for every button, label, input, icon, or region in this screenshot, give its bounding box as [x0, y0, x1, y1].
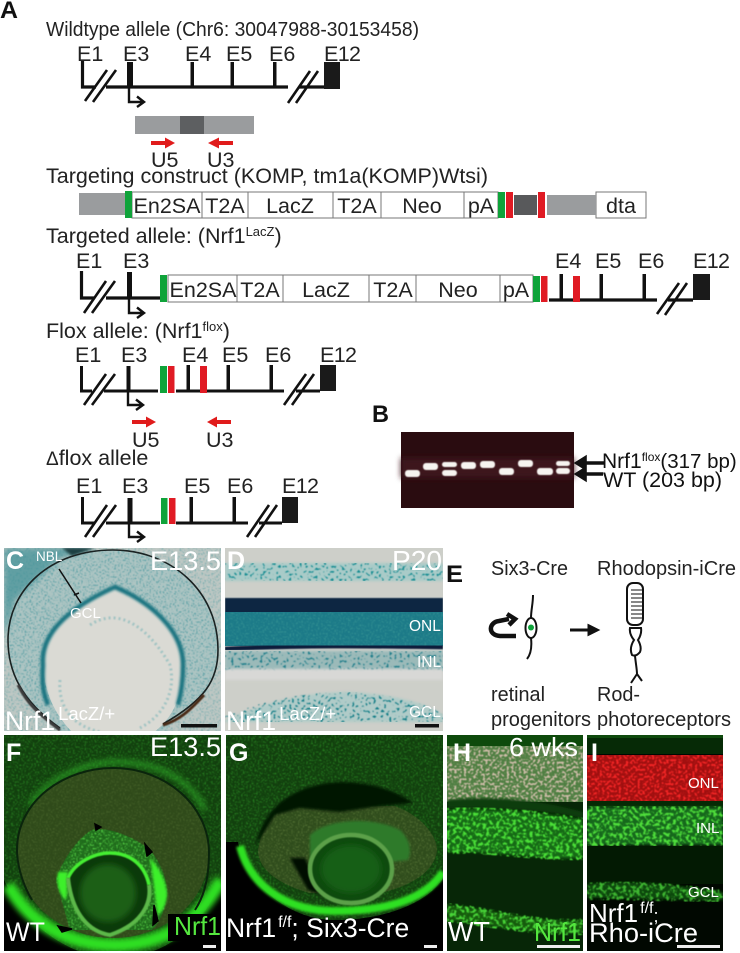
layer labels ONL INL GCL: GCL [409, 704, 441, 721]
gel band labels: WT (203 bp) [603, 469, 722, 492]
flox allele map [75, 343, 357, 410]
arrow to rod [570, 626, 597, 634]
genotype label: Nrf1 [5, 706, 55, 736]
delta flox allele map: E6 [227, 474, 253, 498]
stain label Nrf1: Nrf1 [174, 911, 221, 941]
flox primer arrows U5 and U3: U3 [206, 428, 234, 452]
panel D retina layers image [225, 548, 443, 731]
scale bar [203, 945, 216, 948]
targeting construct bar: pA [468, 194, 495, 218]
gel band labels: flox [642, 450, 660, 464]
layer labels ONL INL GCL: ONL [409, 618, 441, 635]
genotype label: Nrf1 [589, 898, 638, 928]
wildtype allele gene map: E12 [324, 42, 361, 66]
delta flox allele map: E5 [184, 474, 210, 498]
panel C: embryonic LacZ stain [4, 546, 221, 736]
genotype label: ; Six3-Cre [291, 913, 409, 943]
targeting construct bar: T2A [337, 194, 377, 218]
targeted allele heading: LacZ [246, 224, 275, 239]
panel letter F: F [6, 739, 21, 767]
targeting construct bar: Neo [402, 194, 442, 218]
targeted allele heading: Targeted allele: (Nrf1 [46, 224, 246, 248]
flox allele map: E5 [222, 343, 248, 367]
age label 6 wks: 6 wks [509, 732, 578, 762]
delta flox allele map: E12 [282, 474, 319, 498]
panel F: WT immunostain E13.5 [4, 732, 221, 953]
genotype label [589, 898, 698, 948]
flox primer arrows U5 and U3: U5 [132, 428, 160, 452]
panel letter G: G [229, 739, 248, 767]
layer labels ONL INL GCL: ONL [688, 775, 719, 792]
photoreceptor caption: photoreceptors [597, 709, 731, 731]
photoreceptor caption [597, 684, 731, 731]
targeted allele map: pA [503, 278, 530, 302]
stage label P20: P20 [392, 545, 442, 576]
Six3-Cre label: Six3-Cre [491, 558, 568, 580]
targeted allele map: T2A [240, 278, 280, 302]
pointer line NBL to GCL [59, 569, 81, 603]
panel H: WT retina 6 weeks [447, 732, 583, 951]
targeting construct bar: T2A [205, 194, 245, 218]
panel D: P20 LacZ stain [225, 545, 443, 736]
delta flox allele map: E3 [122, 474, 148, 498]
flox allele map: E12 [320, 343, 357, 367]
progenitor caption [491, 684, 591, 731]
genotype label: Nrf1 [226, 706, 276, 736]
homology region bar [135, 116, 254, 134]
wildtype allele gene map: E5 [226, 42, 252, 66]
targeted allele map: T2A [373, 278, 413, 302]
panel letter E: E [446, 561, 463, 588]
panel B: PCR gel [372, 401, 737, 508]
stain label Nrf1: Nrf1 [534, 917, 581, 947]
wildtype allele gene map: E6 [269, 42, 295, 66]
layer labels ONL INL GCL [688, 775, 719, 901]
gel band labels: Nrf1 [602, 450, 642, 473]
genotype label: f/f [640, 900, 654, 917]
targeted allele map: Neo [438, 278, 478, 302]
targeting construct bar [79, 191, 646, 218]
gel band labels: (317 bp) [660, 450, 737, 473]
panel E: cell schematic [446, 558, 736, 731]
panel H retina layers image [447, 735, 583, 951]
targeted allele map: E5 [595, 249, 621, 273]
gel image [401, 432, 574, 508]
flox allele map: E1 [75, 343, 101, 367]
stage label E13.5: E13.5 [150, 732, 221, 762]
targeting construct bar: dta [606, 194, 636, 218]
targeted allele map [76, 249, 730, 318]
targeted allele map: En2SA [170, 278, 237, 302]
panel G: mutant immunostain [226, 735, 443, 951]
panel letter I: I [591, 739, 598, 767]
wildtype allele heading: Wildtype allele (Chr6: 30047988-30153458) [46, 18, 419, 41]
delta flox allele map: E1 [76, 474, 102, 498]
icon: retinal progenitor cell [526, 595, 536, 659]
panel G eye image [226, 735, 443, 951]
progenitor caption: retinal [491, 684, 545, 706]
scale bar [537, 945, 580, 948]
flox primer arrows U5 and U3 [132, 416, 234, 452]
wildtype allele gene map: E4 [185, 42, 211, 66]
gel band labels [602, 450, 737, 492]
targeting construct heading: Targeting construct (KOMP, tm1a(KOMP)Wtsi) [46, 164, 488, 188]
flox allele heading: ) [223, 319, 230, 343]
gel band arrows [577, 458, 604, 479]
primer arrows U5 and U3: U5 [151, 148, 179, 172]
genotype label: f/f [278, 914, 292, 931]
flox allele map: E3 [121, 343, 147, 367]
panel letter H: H [453, 739, 471, 767]
Rhodopsin-iCre label: Rhodopsin-iCre [597, 558, 736, 580]
panel A: allele diagrams [0, 0, 730, 542]
panel I retina layers image [587, 735, 723, 951]
panel letter C: C [6, 547, 24, 575]
panel letter B: B [372, 401, 389, 428]
panel C tissue image [4, 548, 221, 735]
layer label NBL: NBL [36, 549, 63, 564]
layer labels ONL INL GCL [409, 618, 442, 721]
genotype label WT: WT [6, 917, 45, 947]
genotype label: ; [653, 906, 658, 926]
wildtype allele gene map: E3 [123, 42, 149, 66]
layer labels ONL INL GCL: INL [696, 820, 719, 837]
panel F eye image [4, 735, 221, 953]
icon: rod photoreceptor [627, 583, 643, 683]
targeting construct bar: LacZ [266, 194, 314, 218]
wildtype allele gene map [77, 42, 361, 107]
targeted allele map: LacZ [302, 278, 350, 302]
targeted allele map: E1 [76, 249, 102, 273]
genotype label WT: WT [448, 916, 490, 947]
genotype label: Rho-iCre [589, 918, 698, 948]
scale bar [677, 945, 720, 948]
primer arrows U5 and U3: U3 [207, 148, 235, 172]
targeted allele map: E6 [638, 249, 664, 273]
targeting construct bar: En2SA [134, 194, 201, 218]
panel letter D: D [227, 547, 245, 575]
targeted allele map: E3 [123, 249, 149, 273]
icon: self-renewal curved arrow [491, 614, 516, 636]
photoreceptor caption: Rod- [597, 684, 640, 706]
targeted allele map: E12 [693, 249, 730, 273]
stage label E13.5: E13.5 [150, 546, 221, 576]
genotype label: Nrf1 [226, 913, 276, 943]
layer label GCL: GCL [70, 605, 101, 622]
targeted allele map: E4 [555, 249, 581, 273]
flox allele heading: Flox allele: (Nrf1 [46, 319, 203, 343]
layer labels ONL INL GCL: GCL [688, 884, 719, 901]
flox allele map: E4 [182, 343, 208, 367]
scale bar [181, 724, 217, 728]
flox allele map: E6 [265, 343, 291, 367]
scale bar [424, 945, 437, 948]
panel I: mutant retina 6 weeks [587, 735, 723, 951]
genotype label: LacZ/+ [58, 703, 115, 724]
flox allele heading: flox [203, 319, 223, 334]
layer labels ONL INL GCL: INL [417, 654, 442, 671]
delta flox allele map [76, 474, 319, 542]
scale bar [415, 724, 439, 728]
genotype label: LacZ/+ [279, 703, 336, 724]
progenitor caption: progenitors [491, 709, 591, 731]
delta flox allele heading: Δflox allele [46, 446, 148, 470]
primer arrows U5 and U3 [151, 138, 235, 172]
wildtype allele gene map: E1 [77, 42, 103, 66]
targeted allele heading: ) [274, 224, 282, 248]
